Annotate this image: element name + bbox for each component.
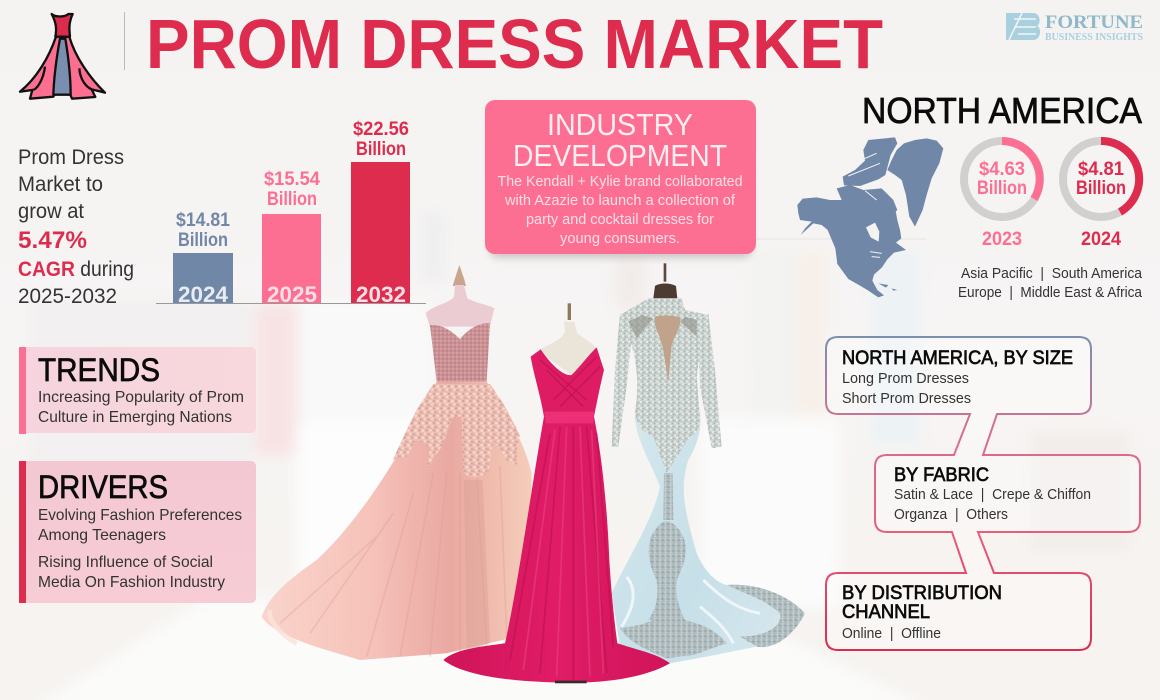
text block: CAGR statement: CAGR during: [18, 258, 134, 281]
panel: drivers: DRIVERS: [38, 469, 168, 505]
panel: trends: Increasing Popularity of Prom: [38, 389, 244, 406]
panel: trends: [19, 347, 256, 434]
text block: other regions: [958, 265, 1143, 301]
bar 2032: $22.56: [353, 119, 409, 140]
logo: Fortune Business Insights: BUSINESS INSIGHTS: [1045, 32, 1143, 43]
panel: industry development: DEVELOPMENT: [513, 138, 727, 173]
donut: 2024 market size: Billion: [1076, 178, 1126, 199]
panel: drivers: Among Teenagers: [38, 527, 166, 544]
connected callout outline: [826, 337, 1140, 650]
text block: other regions: Asia Pacific | South America: [961, 265, 1143, 282]
text block: other regions: Europe | Middle East & Africa: [958, 284, 1143, 301]
title: PROM DRESS MARKET: [146, 5, 883, 83]
donut: 2023 market size: Billion: [977, 178, 1027, 199]
segment: by fabric: Satin & Lace | Crepe & Chiffon: [894, 486, 1091, 503]
donut: 2023 market size: $4.63: [979, 159, 1025, 180]
donut: 2024 market size: $4.81: [1078, 159, 1124, 180]
segment: by distribution channel: BY DISTRIBUTION: [842, 582, 1002, 604]
segment: by distribution channel: [842, 582, 1002, 642]
logo: Fortune Business Insights: FORTUNE: [1045, 12, 1143, 33]
panel: industry development: INDUSTRY: [547, 107, 693, 142]
bar 2024: 2024: [178, 282, 229, 307]
panel: trends: Culture in Emerging Nations: [38, 409, 232, 426]
illustration: pink ball gown: [262, 265, 532, 660]
bar 2032: [351, 119, 410, 307]
donut: 2023 market size: [964, 141, 1040, 250]
panel: industry development: party and cocktail dresses for: [526, 212, 714, 228]
segment: by size: Short Prom Dresses: [842, 390, 971, 407]
bar 2024: Billion: [178, 230, 228, 251]
divider: [124, 12, 125, 70]
bar 2025: Billion: [267, 189, 317, 210]
segment: by fabric: [894, 464, 1091, 523]
panel: market segmentation: [826, 337, 1140, 650]
logo: Fortune Business Insights: [1006, 12, 1143, 43]
panel: drivers: Evolving Fashion Preferences: [38, 507, 242, 524]
icon: dress: [20, 14, 105, 99]
text block: CAGR statement: 5.47%: [18, 227, 87, 254]
panel: industry development: young consumers.: [560, 231, 680, 247]
bar 2025: 2025: [267, 282, 317, 307]
text block: CAGR statement: grow at: [18, 200, 84, 223]
bar chart: market size: [156, 119, 426, 307]
panel: industry development: with Azazie to launch a collection of: [504, 193, 736, 209]
segment: by size: [842, 347, 1073, 407]
bar 2024: [173, 210, 233, 307]
text block: CAGR statement: Prom Dress: [18, 146, 124, 169]
panel: drivers: Media On Fashion Industry: [38, 574, 225, 591]
panel: industry development: [485, 100, 756, 258]
illustration: blue mermaid gown: [612, 263, 805, 663]
donut: 2024 market size: 2024: [1081, 229, 1121, 250]
donut: 2023 market size: 2023: [982, 229, 1022, 250]
text block: CAGR statement: Market to: [18, 173, 103, 196]
segment: by size: Long Prom Dresses: [842, 370, 969, 387]
segment: by size: NORTH AMERICA, BY SIZE: [842, 347, 1073, 369]
bar 2025: [262, 169, 321, 307]
bar 2032: 2032: [356, 282, 406, 307]
text block: CAGR statement: [18, 146, 134, 308]
heading: North America: NORTH AMERICA: [862, 90, 1142, 131]
segment: by distribution channel: Online | Offline: [842, 625, 941, 642]
map: North America: [797, 137, 943, 297]
bar 2025: $15.54: [264, 169, 320, 190]
panel: trends: TRENDS: [38, 352, 160, 388]
segment: by distribution channel: CHANNEL: [842, 601, 930, 623]
bar 2024: $14.81: [176, 210, 230, 231]
text block: CAGR statement: 2025-2032: [18, 285, 117, 308]
bar 2032: Billion: [356, 139, 406, 160]
segment: by fabric: BY FABRIC: [894, 464, 989, 486]
donut: 2024 market size: [1063, 141, 1139, 250]
panel: industry development: The Kendall + Kylie brand collaborated: [498, 174, 742, 190]
panel: drivers: Rising Influence of Social: [38, 554, 213, 571]
segment: by fabric: Organza | Others: [894, 506, 1008, 523]
panel: drivers: [19, 461, 256, 603]
illustration: crimson long gown: [443, 303, 670, 683]
